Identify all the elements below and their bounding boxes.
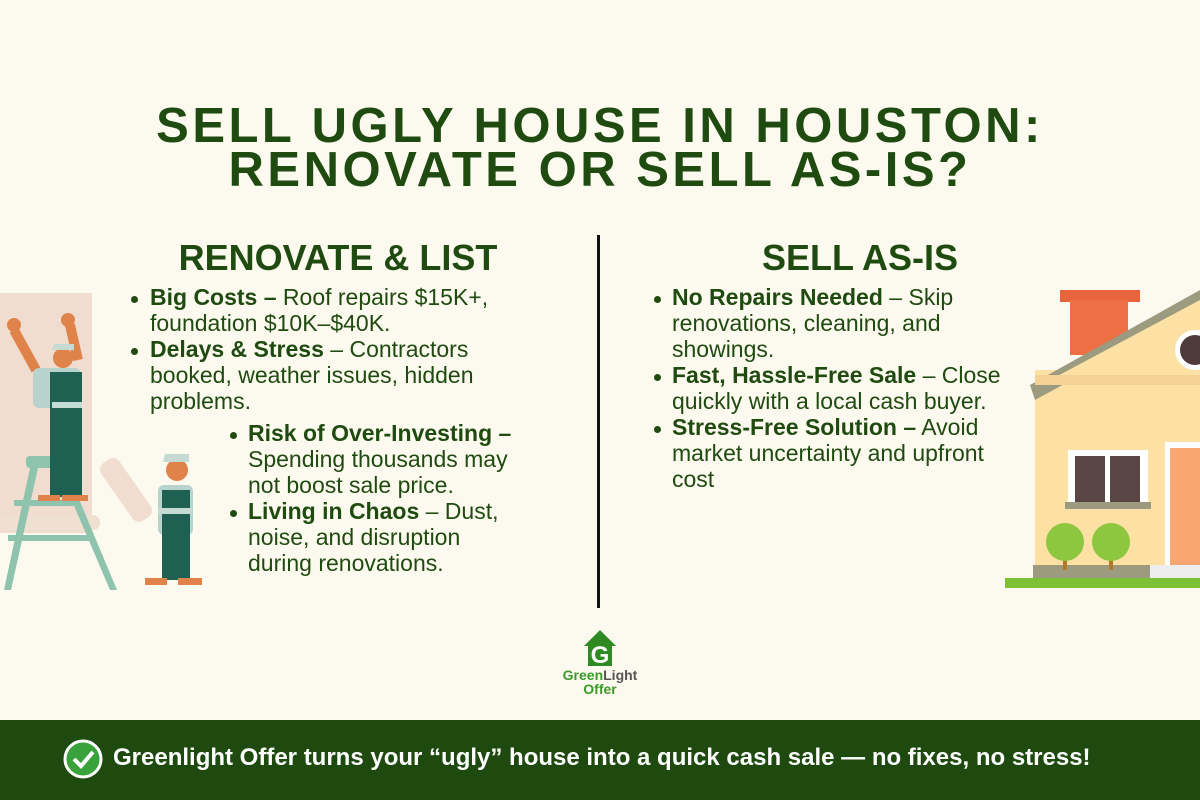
panel: sell as-is list: quickly with a local cash buyer. (672, 388, 986, 414)
heading: sell as-is: SELL AS-IS (762, 237, 958, 278)
panel: sell as-is list: renovations, cleaning, and (672, 310, 941, 336)
panel: sell as-is list: showings. (672, 336, 774, 362)
panel: sell as-is list: market uncertainty and upfront (672, 440, 984, 466)
panel: renovate list: Risk of Over-Investing – (248, 420, 511, 446)
panel: renovate list (131, 284, 511, 576)
panel: renovate list: foundation $10K–$40K. (150, 310, 390, 336)
panel: renovate list: Delays & Stress – Contractors (150, 336, 468, 362)
panel: renovate list: booked, weather issues, hidden (150, 362, 474, 388)
panel: renovate list: during renovations. (248, 550, 444, 576)
panel: renovate list: problems. (150, 388, 251, 414)
title: SELL UGLY HOUSE IN HOUSTON: (156, 99, 1044, 153)
logo (563, 630, 638, 697)
title: RENOVATE OR SELL AS-IS? (229, 143, 971, 197)
footer banner (0, 720, 1200, 800)
icon: check (64, 740, 102, 778)
heading: renovate & list: RENOVATE & LIST (179, 237, 497, 278)
panel: sell as-is list (654, 284, 1001, 492)
panel: renovate list: noise, and disruption (248, 524, 460, 550)
panel: renovate list: not boost sale price. (248, 472, 454, 498)
panel: renovate list: Spending thousands may (248, 446, 508, 472)
panel: sell as-is list: Fast, Hassle-Free Sale – Close (672, 362, 1001, 388)
footer text: Greenlight Offer turns your “ugly” house into a quick cash sale — no fixes, no stress! (113, 744, 1091, 771)
illustration: workers (0, 293, 202, 590)
panel: renovate list: Big Costs – Roof repairs $15K+, (150, 284, 488, 310)
title (156, 99, 1044, 197)
panel: sell as-is list: cost (672, 466, 714, 492)
panel: renovate list: Living in Chaos – Dust, (248, 498, 498, 524)
logo: GreenLight (563, 667, 637, 683)
divider (597, 235, 600, 608)
panel: sell as-is list: Stress-Free Solution – Avoid (672, 414, 978, 440)
panel: sell as-is list: No Repairs Needed – Skip (672, 284, 953, 310)
illustration: house (1005, 290, 1200, 588)
logo: Offer (583, 681, 617, 697)
